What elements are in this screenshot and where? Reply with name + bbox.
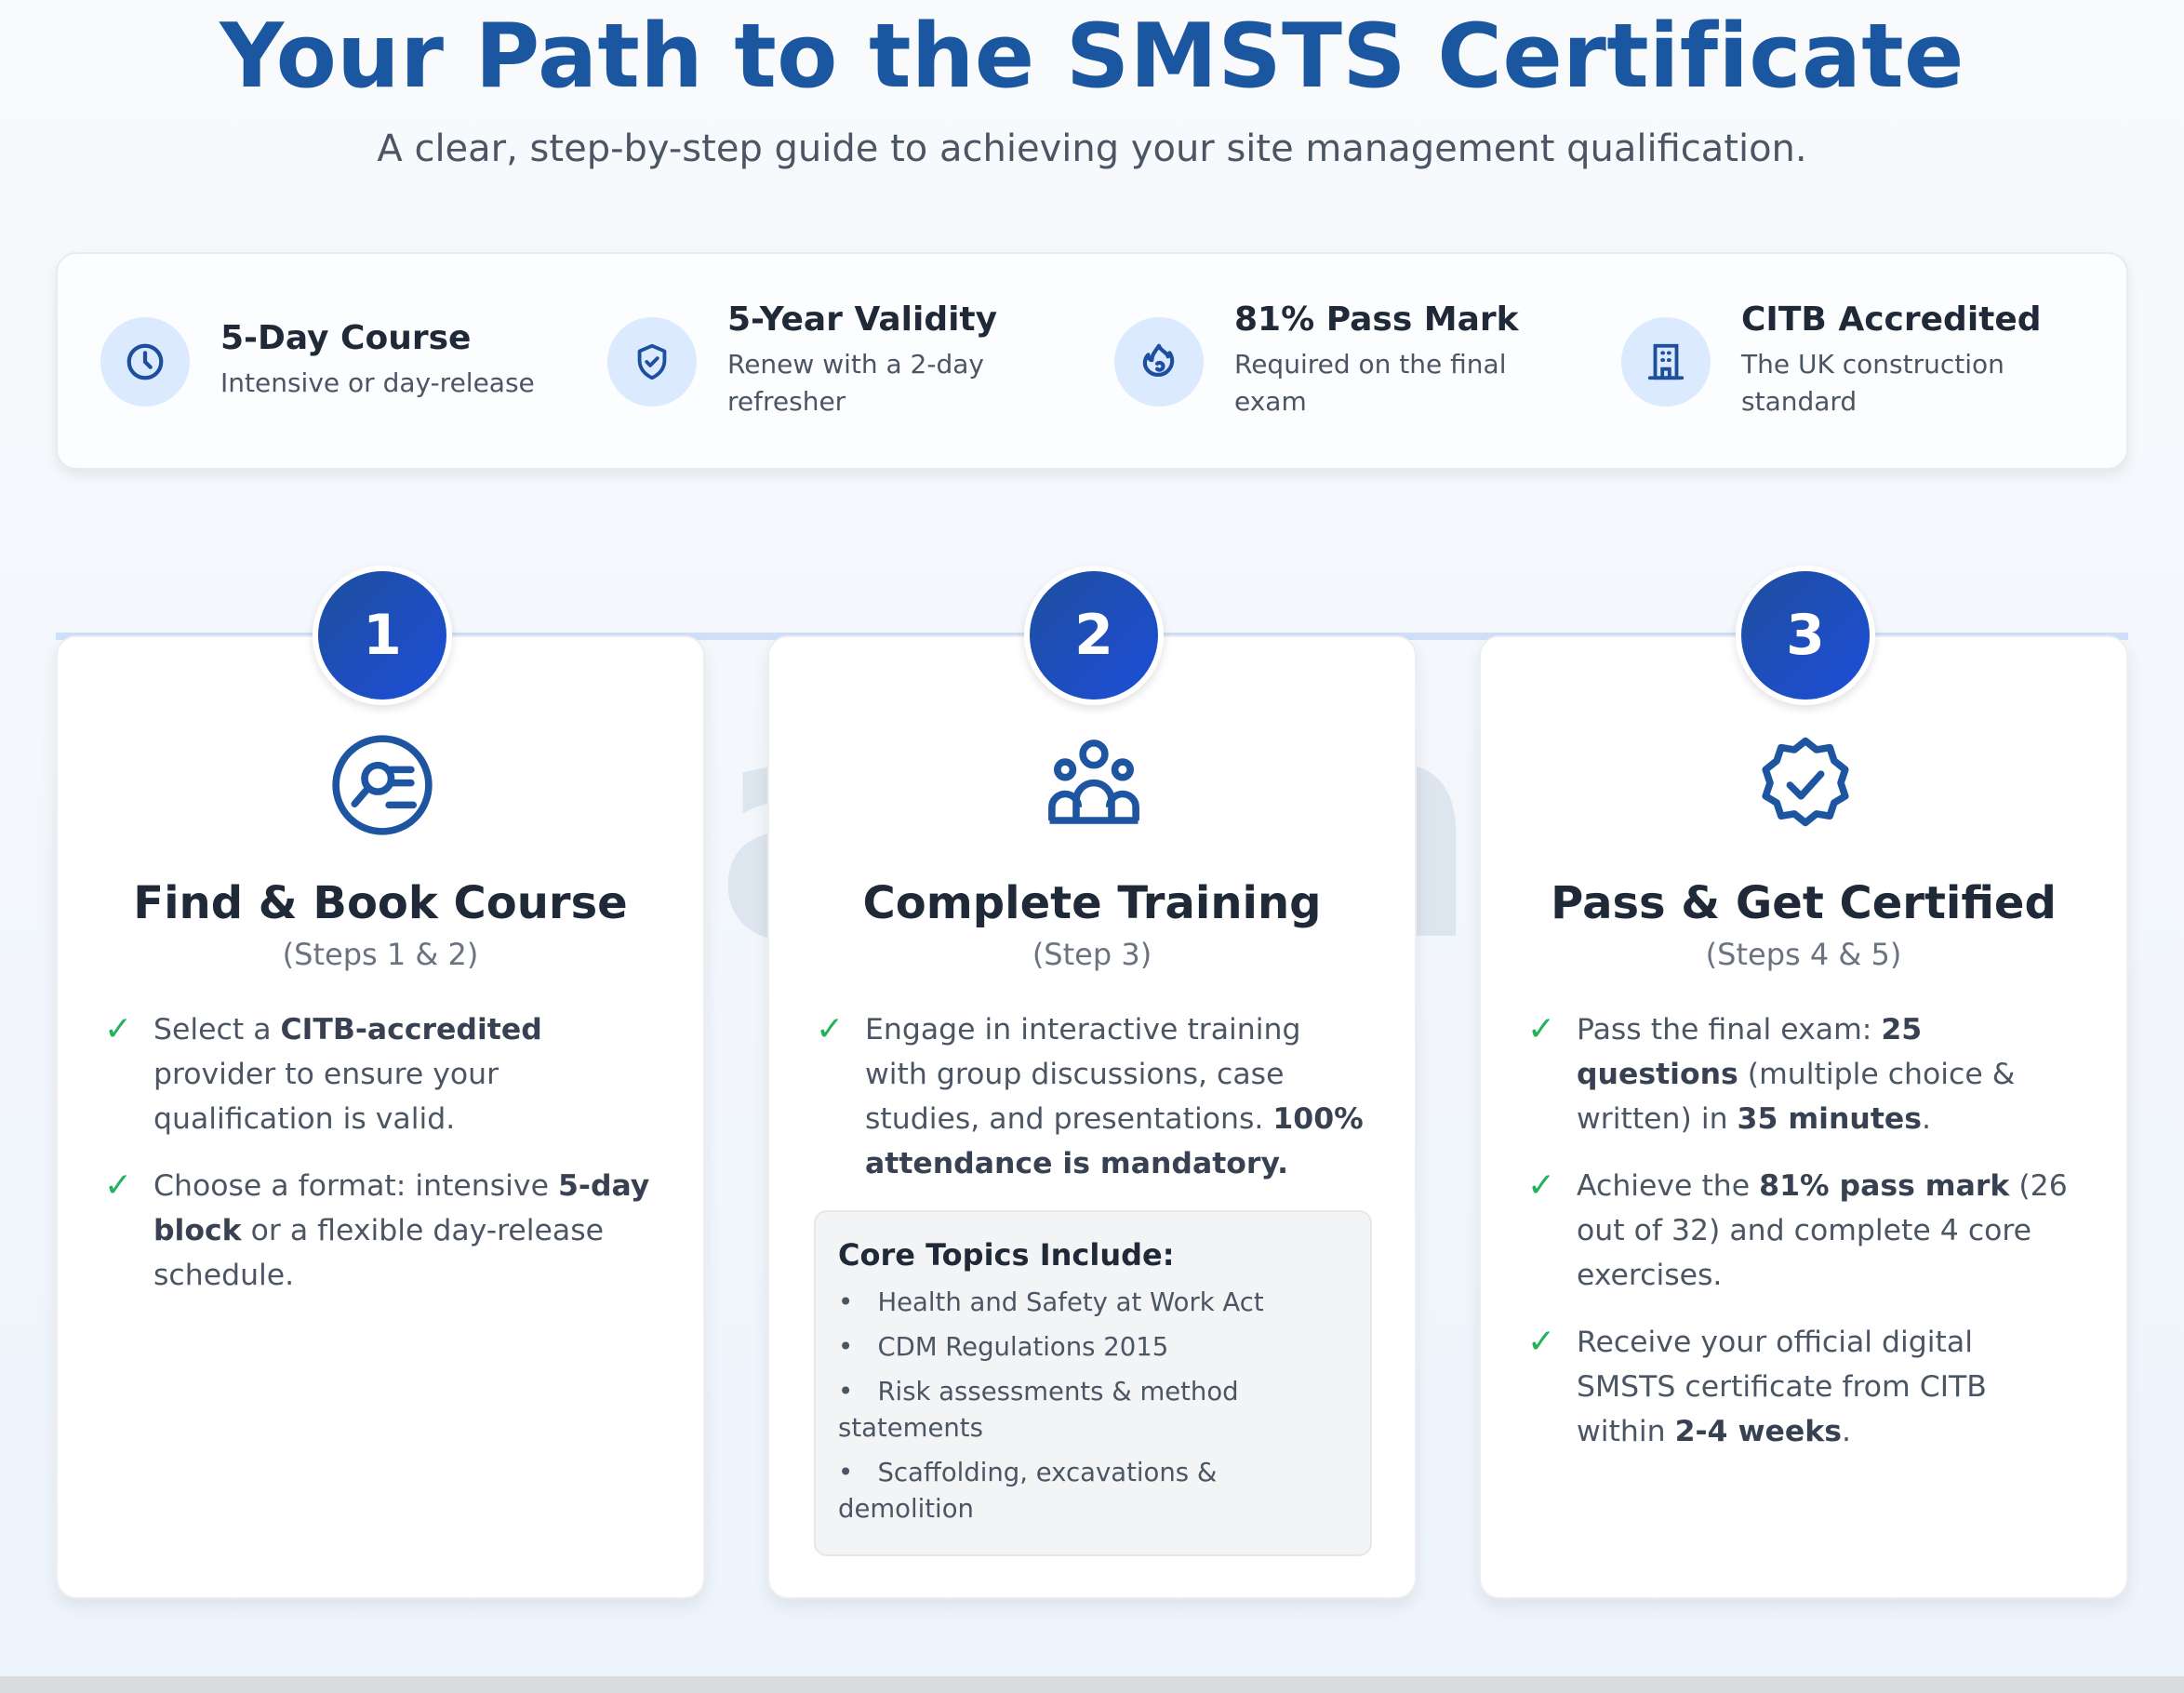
stat: 5-day course: Intensive or day-release xyxy=(220,367,535,398)
stat: 5-year validity: Renew with a 2-day refresher xyxy=(727,349,984,417)
heading: Complete Training xyxy=(863,877,1321,929)
timeline line xyxy=(56,633,2128,640)
card 2: complete training: (Step 3) xyxy=(1032,937,1152,972)
panel: key stats xyxy=(56,252,2128,470)
icon: group xyxy=(1048,740,1139,824)
step number 2 xyxy=(1024,566,1164,705)
step number 1 xyxy=(313,566,452,705)
core topics box: Core Topics Include: xyxy=(838,1237,1174,1273)
checklist: Receive your official digital SMSTS certificate from CITB within 2-4 weeks. xyxy=(1577,1326,1987,1448)
watermark: Roadmap xyxy=(249,651,1935,1008)
core topics box: • Risk assessments & method statements xyxy=(838,1377,1239,1443)
core topics box: • CDM Regulations 2015 xyxy=(838,1332,1168,1362)
subtitle: A clear, step-by-step guide to achieving your site management qualification. xyxy=(377,127,1807,170)
stat: pass mark: Required on the final exam xyxy=(1234,349,1506,417)
core topics box: • Health and Safety at Work Act xyxy=(838,1287,1264,1317)
card 1: find & book: (Steps 1 & 2) xyxy=(283,937,478,972)
checklist: Choose a format: intensive 5-day block or a flexible day-release schedule. xyxy=(153,1169,649,1292)
card 2: complete training xyxy=(767,635,1417,1599)
checklist: Engage in interactive training with group discussions, case studies, and presentations. 100% attendance is mandatory. xyxy=(865,1013,1364,1180)
icon: shield xyxy=(607,317,697,407)
heading: Pass & Get Certified xyxy=(1551,877,2057,929)
icon: search xyxy=(332,735,433,835)
heading: Find & Book Course xyxy=(133,877,628,929)
card 3: pass & certified xyxy=(1479,635,2128,1599)
checklist: Select a CITB-accredited provider to ensure your qualification is valid. xyxy=(153,1013,542,1136)
card 3: pass & certified: (Steps 4 & 5) xyxy=(1706,937,1901,972)
stat: CITB accredited: CITB Accredited xyxy=(1741,300,2042,339)
step number 3 xyxy=(1736,566,1875,705)
checklist xyxy=(1532,1013,2068,1448)
icon: building xyxy=(1621,317,1711,407)
step number 1: 1 xyxy=(363,603,402,668)
stat: CITB accredited xyxy=(1621,300,2042,417)
icon: flame xyxy=(1114,317,1204,407)
checklist: Achieve the 81% pass mark (26 out of 32) and complete 4 core exercises. xyxy=(1577,1169,2068,1292)
checklist: Pass the final exam: 25 questions (multiple choice & written) in 35 minutes. xyxy=(1577,1013,2015,1136)
step number 3: 3 xyxy=(1786,603,1825,668)
stat: 5-year validity xyxy=(607,300,997,417)
icon: badge check xyxy=(1762,737,1849,826)
title: Your Path to the SMSTS Certificate xyxy=(220,6,1964,108)
checklist xyxy=(109,1013,649,1292)
card 1: find & book xyxy=(56,635,705,1599)
stat: 5-day course: 5-Day Course xyxy=(220,319,471,357)
core topics box xyxy=(814,1210,1372,1556)
stat: pass mark xyxy=(1114,300,1520,417)
core topics box: • Scaffolding, excavations & demolition xyxy=(838,1458,1217,1524)
stat: 5-year validity: 5-Year Validity xyxy=(727,300,997,339)
stat: 5-day course xyxy=(100,317,535,407)
stat: CITB accredited: The UK construction standard xyxy=(1741,349,2004,417)
stat: pass mark: 81% Pass Mark xyxy=(1234,300,1519,339)
step number 2: 2 xyxy=(1074,603,1113,668)
icon: clock xyxy=(100,317,190,407)
